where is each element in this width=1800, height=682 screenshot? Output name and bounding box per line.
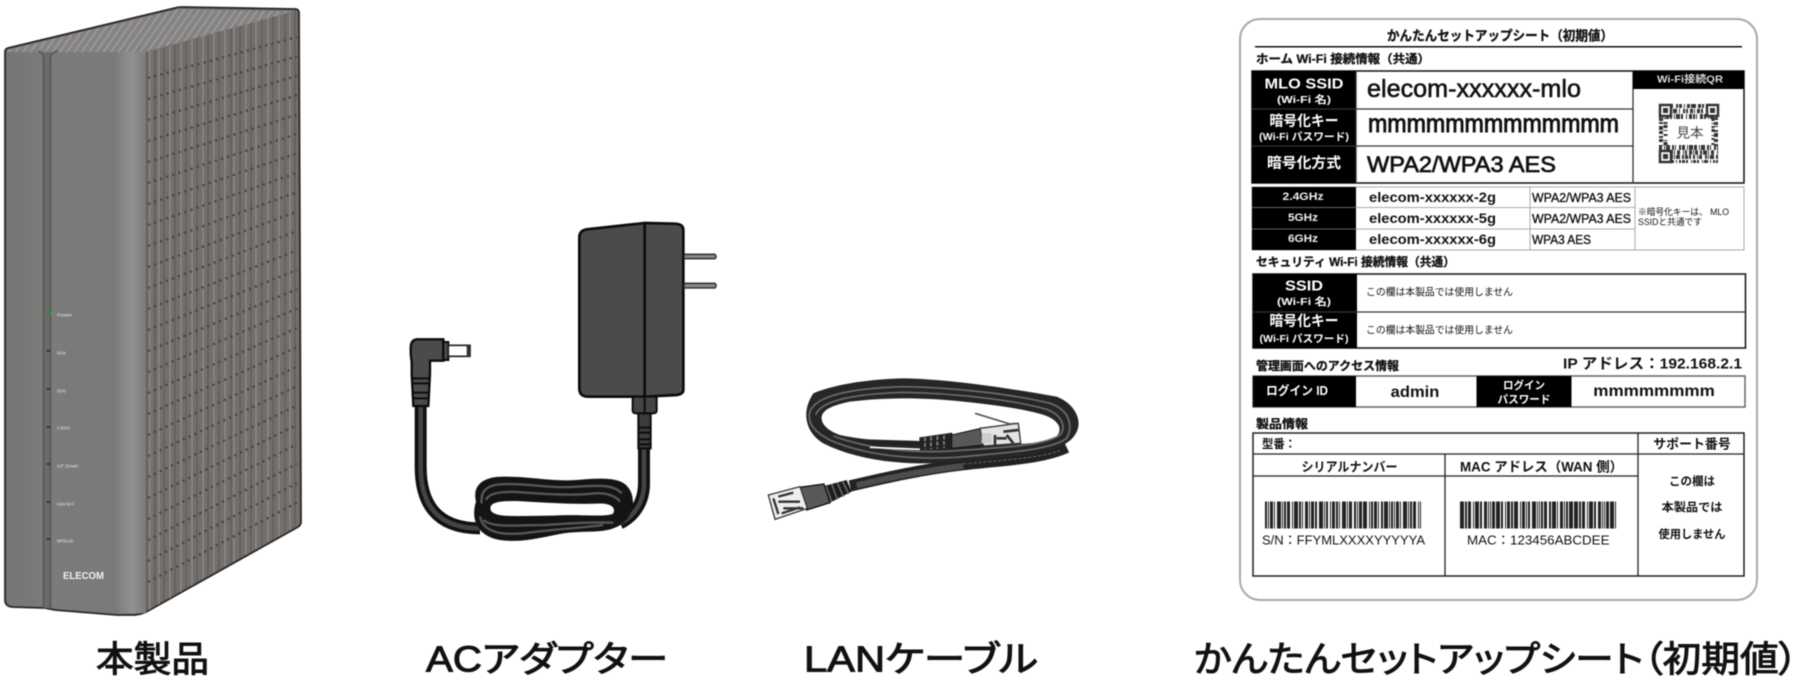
security label cells	[1253, 274, 1357, 348]
table: security Wi-Fi	[1253, 274, 1746, 348]
LAN cable tail to lower connector	[850, 447, 1067, 486]
login ID label: ログイン ID	[1266, 383, 1328, 398]
login ID cell	[1253, 376, 1356, 407]
router LED labels: 5GHz	[57, 388, 67, 394]
serial number header: シリアルナンバー	[1302, 460, 1398, 474]
password label line 2: パスワード	[1498, 393, 1550, 406]
caption: router: 本製品	[96, 638, 209, 680]
unused note 1: この欄は本製品では使用しません	[1366, 286, 1513, 298]
router LED labels: Home Wi-Fi	[57, 502, 74, 506]
router LED labels: 2.4GHz	[57, 426, 71, 430]
caption: AC adapter: ACアダプター	[426, 638, 668, 680]
label: encryption key: 暗号化キー	[1270, 113, 1338, 130]
panel: LAN cable	[768, 378, 1079, 519]
heading: product info: 製品情報	[1256, 416, 1308, 431]
LAN upper connector	[867, 413, 1021, 450]
label: Wi-Fi password: (Wi-Fi パスワード)	[1260, 333, 1348, 345]
label: MLO SSID: MLO SSID	[1264, 76, 1344, 92]
SSID 6g: elecom-xxxxxx-6g	[1369, 231, 1496, 247]
note: SSIDと共通です	[1638, 217, 1702, 227]
SSID 2g: elecom-xxxxxx-2g	[1369, 189, 1496, 205]
adapter body	[579, 223, 683, 397]
label: SSID: SSID	[1285, 278, 1323, 294]
adapter prongs	[684, 254, 716, 288]
admin value: admin	[1391, 384, 1439, 401]
value: key: mmmmmmmmmmmmm	[1368, 110, 1619, 138]
note: ※暗号化キーは、 MLO	[1638, 207, 1729, 217]
support number header: サポート番号	[1653, 436, 1731, 452]
panel: router (本製品)	[5, 0, 301, 620]
band dividers	[1356, 187, 1635, 250]
router front groove	[38, 51, 58, 609]
title rule	[1255, 46, 1742, 48]
router LED labels: IoT Smart	[57, 464, 79, 468]
caption: LAN cable: LANケーブル	[804, 638, 1038, 680]
router body outline	[5, 7, 301, 615]
router status LEDs	[46, 311, 51, 540]
row dividers	[1252, 71, 1633, 183]
QR header text: Wi-Fi接続QR	[1657, 72, 1724, 86]
router side vents	[146, 0, 297, 620]
sheet card	[1240, 19, 1757, 600]
support note line 2: 本製品では	[1662, 500, 1723, 514]
heading: admin access: 管理画面へのアクセス情報	[1256, 358, 1399, 373]
method 5g: WPA2/WPA3 AES	[1532, 211, 1631, 226]
adapter seam	[641, 223, 649, 397]
router LED labels: 6GHz	[57, 350, 67, 356]
router LED labels: WPS/Link	[57, 538, 74, 544]
band label cells	[1252, 187, 1356, 250]
QR sample text: 見本	[1676, 126, 1704, 140]
router front face	[6, 52, 146, 614]
MAC value: MAC：123456ABCDEE	[1467, 532, 1610, 548]
label: encryption method: 暗号化方式	[1267, 154, 1342, 172]
panel: AC adapter	[411, 223, 716, 541]
table: frequency bands	[1252, 187, 1744, 250]
QR sample window	[1668, 120, 1711, 145]
label: Wi-Fi password: (Wi-Fi パスワード)	[1259, 131, 1349, 143]
QR header	[1633, 71, 1744, 89]
label: Wi-Fi name: (Wi-Fi 名)	[1277, 93, 1331, 106]
support note line 3: 使用しません	[1658, 527, 1726, 541]
router top face	[7, 9, 295, 52]
security divider	[1253, 311, 1745, 313]
support note line 1: この欄は	[1669, 474, 1715, 488]
table: product info	[1253, 433, 1744, 576]
value: method: WPA2/WPA3 AES	[1367, 152, 1556, 177]
router ELECOM logo: ELECOM	[63, 570, 104, 582]
serial value: S/N：FFYMLXXXXYYYYYA	[1262, 532, 1425, 548]
panel: setup sheet	[1240, 19, 1757, 600]
MLO label cells	[1252, 71, 1356, 183]
method 2g: WPA2/WPA3 AES	[1532, 190, 1631, 205]
value: SSID: elecom-xxxxxx-mlo	[1367, 75, 1581, 103]
table: MLO SSID	[1252, 71, 1744, 183]
LAN cable coil	[806, 378, 1079, 463]
password cell	[1476, 376, 1572, 407]
table: login	[1253, 376, 1745, 407]
unused note 2: この欄は本製品では使用しません	[1366, 324, 1513, 336]
SSID 5g: elecom-xxxxxx-5g	[1369, 210, 1496, 226]
barcode: MAC	[1460, 502, 1616, 528]
router LED labels: Power	[57, 312, 73, 318]
method 6g: WPA3 AES	[1532, 232, 1591, 247]
router LED labels	[57, 312, 79, 544]
sheet title: かんたんセットアップシート（初期値）	[1387, 28, 1613, 44]
caption: setup sheet: かんたんセットアップシート（初期値）	[1194, 638, 1798, 680]
QR code sample	[1659, 105, 1718, 162]
model label: 型番：	[1262, 437, 1296, 451]
QR finder patterns	[1660, 105, 1718, 162]
MAC header: MAC アドレス（WAN 側）	[1460, 460, 1623, 474]
band: 2.4GHz: 2.4GHz	[1282, 191, 1324, 203]
adapter coiled cord	[421, 407, 644, 541]
LAN lower connector	[768, 480, 852, 519]
heading: home Wi-Fi: ホーム Wi-Fi 接続情報（共通）	[1256, 51, 1430, 66]
heading: security Wi-Fi: セキュリティ Wi-Fi 接続情報（共通）	[1256, 254, 1455, 269]
password label line 1: ログイン	[1503, 378, 1545, 392]
product table lines	[1253, 433, 1744, 576]
adapter DC plug	[411, 339, 470, 406]
IP address: IP アドレス：192.168.2.1	[1563, 356, 1742, 372]
label: encryption key: 暗号化キー	[1270, 313, 1338, 330]
band: 5GHz: 5GHz	[1288, 212, 1319, 224]
barcode: serial	[1265, 502, 1421, 528]
note	[1638, 207, 1729, 227]
band: 6GHz: 6GHz	[1288, 233, 1319, 245]
label: Wi-Fi name: (Wi-Fi 名)	[1277, 295, 1331, 308]
password value: mmmmmmmm	[1593, 383, 1715, 400]
adapter strain relief	[633, 397, 657, 448]
